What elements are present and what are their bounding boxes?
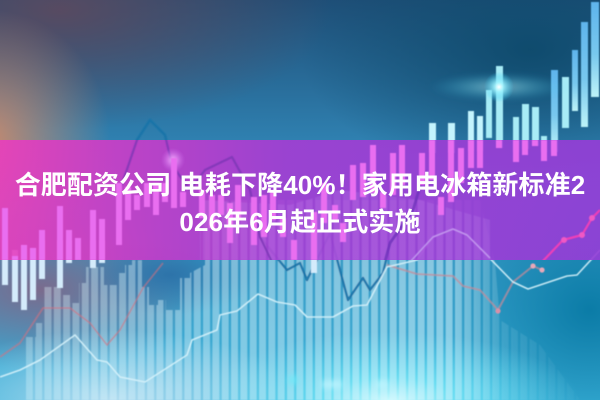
title text: 合肥配资公司 电耗下降40%！家用电冰箱新标准2 bbox=[15, 170, 585, 200]
dark trend line bbox=[120, 120, 413, 300]
banner trend lines bbox=[122, 140, 600, 260]
background bar stripes bbox=[26, 200, 580, 400]
title text: 026年6月起正式实施 bbox=[179, 207, 421, 237]
candlesticks above the banner bbox=[429, 2, 599, 153]
glowing star highlight bbox=[429, 72, 569, 102]
white trend line bbox=[0, 229, 600, 382]
pink candlesticks bbox=[2, 140, 557, 260]
title text bbox=[15, 170, 585, 237]
bottom light spots bbox=[288, 375, 388, 388]
red trend line bbox=[0, 263, 545, 357]
title banner bbox=[0, 140, 600, 260]
candlesticks below the banner bbox=[2, 240, 317, 310]
banner line markers bbox=[561, 215, 595, 243]
banner glow bbox=[163, 150, 183, 170]
chart seen through the banner bbox=[2, 140, 600, 260]
banner bar stripes bbox=[200, 190, 490, 260]
